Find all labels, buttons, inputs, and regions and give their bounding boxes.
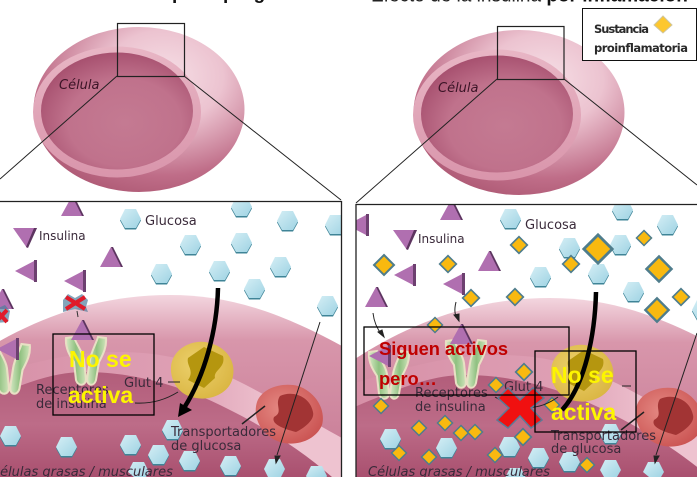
zoom frame and lines: left (0, 24, 341, 200)
panel frame: right (356, 204, 697, 477)
glucose molecules (380, 200, 697, 477)
membrane labels: de glucosa (171, 439, 241, 454)
cell label: Célula (59, 78, 100, 93)
blocked markers (0, 294, 88, 323)
membrane labels: Receptores (415, 386, 488, 401)
insulin receptors (0, 320, 106, 394)
membrane labels: Glucosa (525, 218, 577, 233)
icon: right cell (413, 30, 624, 195)
callout: no se activa (right): activa (551, 399, 616, 425)
membrane labels: Transportadores (170, 425, 276, 440)
membrane labels: Glut 4 (504, 380, 543, 395)
membrane labels: de glucosa (551, 442, 621, 457)
membrane labels: de insulina (36, 397, 107, 412)
membrane labels: Receptores (36, 383, 109, 398)
membrane labels (36, 214, 276, 454)
legend: proinflammatory substance: proinflamatoria (594, 41, 688, 55)
callout: still active (364, 327, 569, 395)
proinflammatory diamonds (374, 230, 689, 472)
callout: still active: Siguen activos (379, 338, 508, 359)
callout: no se activa (left): No se (69, 346, 132, 372)
insulin receptors (369, 324, 486, 399)
panel: left zoomed cell membrane (0, 202, 341, 477)
membrane labels: Insulina (418, 232, 465, 246)
glucose molecules (0, 197, 346, 477)
callout: no se activa (right): No se (551, 362, 614, 388)
membrane labels: Glucosa (145, 214, 197, 229)
callout: still active: pero… (379, 368, 437, 389)
membrane labels (415, 218, 656, 457)
callout: no se activa (left): activa (68, 382, 133, 408)
legend: proinflammatory substance: Sustancia (594, 22, 649, 36)
arrows (135, 288, 320, 463)
membrane labels: de insulina (415, 400, 486, 415)
cell label: Célula (438, 81, 479, 96)
insulin triangles (0, 196, 123, 309)
membrane labels: Glut 4 (124, 376, 163, 391)
callout: no se activa (left) (53, 334, 154, 415)
panel: right zoomed cell membrane (340, 200, 697, 477)
arrows (373, 292, 697, 463)
icon: left cell (33, 27, 244, 192)
icon: red X blocked (497, 388, 544, 428)
panel frame: left (0, 202, 342, 477)
insulin triangles (356, 205, 501, 307)
callout: no se activa (right) (535, 351, 636, 432)
membrane labels: Insulina (39, 229, 86, 243)
membrane labels: Transportadores (550, 429, 656, 444)
zoom frame and lines: right (356, 26, 697, 203)
legend: proinflammatory substance (582, 8, 696, 60)
